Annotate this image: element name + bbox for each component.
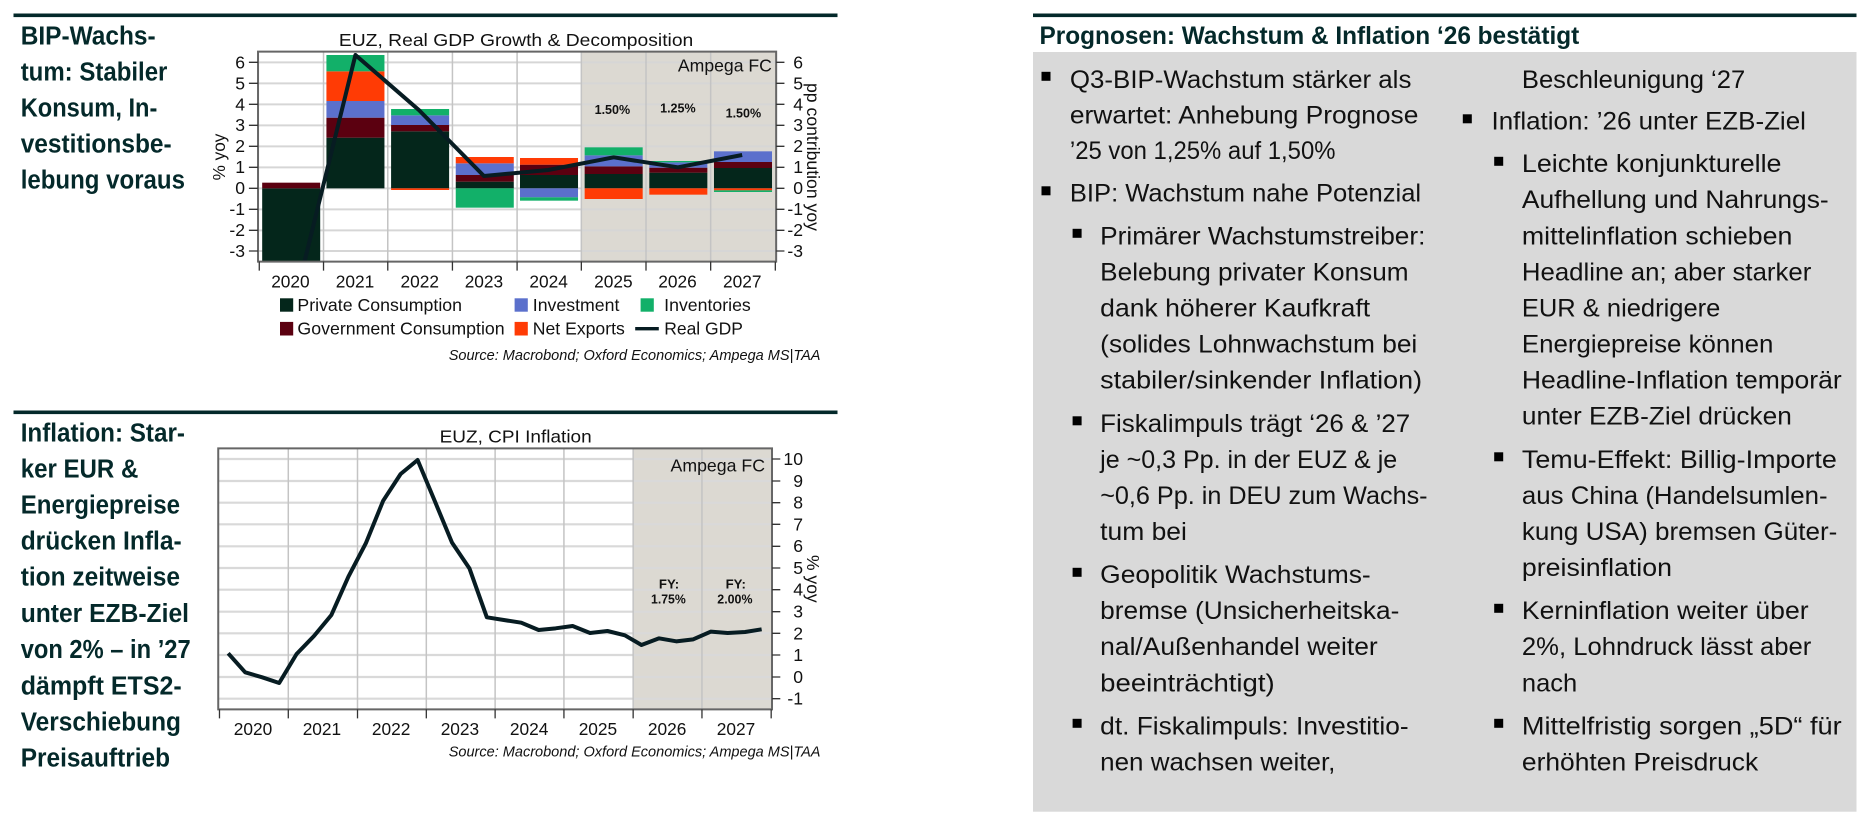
chart: GDP growth and decomposition: 0 (793, 178, 803, 198)
chart: GDP growth and decomposition: 1.25% (660, 101, 696, 115)
text column 2: kung USA) bremsen Güter- (1522, 518, 1837, 546)
chart: CPI inflation: 2021 (303, 719, 341, 739)
chart: GDP growth and decomposition: -3 (229, 241, 245, 261)
text column 1: nen wachsen weiter, (1100, 748, 1335, 776)
text column 2: mittelinflation schieben (1522, 222, 1792, 250)
chart: GDP growth and decomposition: 2 (793, 136, 803, 156)
chart: CPI inflation: 1.75% (651, 592, 686, 606)
heading: GDP: BIP-Wachs- (21, 22, 156, 50)
legend: Real GDP (664, 318, 743, 338)
heading: inflation: dämpft ETS2- (21, 672, 182, 700)
text column 1: dt. Fiskalimpuls: Investitio- (1100, 712, 1409, 740)
text column 1: nal/Außenhandel weiter (1100, 633, 1378, 661)
text column 2: Headline-Inflation temporär (1522, 367, 1842, 395)
chart: CPI inflation: 9 (793, 471, 803, 491)
text column 1: BIP: Wachstum nahe Potenzial (1070, 180, 1421, 208)
text column 2: Energiepreise können (1522, 331, 1773, 359)
text column 2: aus China (Handelsumlen- (1522, 482, 1828, 510)
text column 1 (1042, 66, 1428, 776)
chart: GDP growth and decomposition: -1 (229, 199, 245, 219)
heading: inflation: Verschiebung (21, 709, 181, 737)
text column 1: Fiskalimpuls trägt ‘26 & ’27 (1100, 410, 1410, 438)
panel: inflation section (14, 410, 838, 772)
text column 2: unter EZB-Ziel drücken (1522, 403, 1792, 431)
text column 2: Temu-Effekt: Billig-Importe (1522, 446, 1837, 474)
chart: CPI inflation: EUZ, CPI Inflation (440, 427, 592, 447)
chart: CPI inflation: 2.00% (717, 592, 752, 606)
text column 2: Mittelfristig sorgen „5D“ für (1522, 712, 1842, 740)
heading: forecasts: Prognosen: Wachstum & Inflation ‘26 bestätigt (1040, 22, 1580, 50)
text column 2: Inflation: ’26 unter EZB-Ziel (1492, 108, 1806, 136)
heading: inflation (21, 419, 191, 772)
chart: GDP growth and decomposition: 2025 (594, 272, 633, 292)
chart: GDP growth and decomposition: -1 (787, 199, 803, 219)
text column 2: preisinflation (1522, 554, 1672, 582)
heading: inflation: Inflation: Star- (21, 419, 185, 447)
chart: GDP growth and decomposition: 2027 (723, 272, 762, 292)
text column 2: 2%, Lohndruck lässt aber (1522, 633, 1811, 661)
chart: CPI inflation: 7 (793, 514, 803, 534)
chart: GDP growth and decomposition: 1.50% (726, 106, 761, 120)
text column 2: nach (1522, 669, 1577, 697)
heading: GDP: tum: Stabiler (21, 58, 167, 86)
text column 1: Belebung privater Konsum (1100, 258, 1409, 286)
text column 2: Beschleunigung ‘27 (1522, 66, 1745, 94)
heading: inflation: unter EZB-Ziel (21, 600, 189, 628)
chart: CPI inflation: 8 (793, 493, 803, 513)
chart: CPI inflation: 1 (793, 645, 803, 665)
text column 1: dank höherer Kaufkraft (1100, 295, 1370, 323)
chart: GDP growth and decomposition: -2 (787, 220, 803, 240)
chart: CPI inflation: 5 (793, 558, 803, 578)
text column 2: Headline an; aber starker (1522, 258, 1811, 286)
chart: CPI inflation: FY: (659, 577, 679, 591)
chart: CPI inflation: 2 (793, 623, 803, 643)
chart: GDP growth and decomposition: 2022 (400, 272, 439, 292)
heading: inflation: ker EUR & (21, 455, 138, 483)
text column 1: (solides Lohnwachstum bei (1100, 331, 1417, 359)
chart: GDP growth and decomposition: 1 (235, 157, 245, 177)
text column 1: Primärer Wachstumstreiber: (1100, 222, 1425, 250)
chart: CPI inflation: 2024 (510, 719, 549, 739)
chart: GDP growth and decomposition (209, 30, 823, 364)
chart: GDP growth and decomposition: 0 (235, 178, 245, 198)
chart: CPI inflation: Ampega FC (670, 456, 765, 476)
heading: GDP: lebung voraus (21, 166, 185, 194)
text column 1: je ~0,3 Pp. in der EUZ & je (1099, 446, 1397, 474)
chart: CPI inflation: Source: Macrobond; Oxford Economics; Ampega MS|TAA (449, 744, 820, 761)
heading: GDP: Konsum, In- (21, 94, 157, 122)
legend: Government Consumption (297, 318, 505, 338)
chart: GDP growth and decomposition: 5 (793, 73, 803, 93)
heading: inflation: tion zeitweise (21, 564, 180, 592)
text column 1: ~0,6 Pp. in DEU zum Wachs- (1100, 482, 1428, 510)
chart: CPI inflation: 3 (793, 602, 803, 622)
legend: Private Consumption (297, 295, 462, 315)
text column 1: erwartet: Anhebung Prognose (1070, 102, 1418, 130)
chart: GDP growth and decomposition: 1.50% (595, 103, 630, 117)
chart: GDP growth and decomposition: 1 (793, 157, 803, 177)
chart: GDP growth and decomposition: Source: Macrobond; Oxford Economics; Ampega MS|TAA (449, 347, 820, 364)
chart: CPI inflation: -1 (787, 689, 803, 709)
legend (280, 295, 751, 338)
chart: GDP growth and decomposition: pp contribution yoy (803, 83, 823, 231)
text column 1: Geopolitik Wachstums- (1100, 561, 1371, 589)
heading: inflation: Energiepreise (21, 491, 180, 519)
heading: inflation: von 2% – in ’27 (21, 636, 191, 664)
text column 2: Kerninflation weiter über (1522, 597, 1809, 625)
text column 2: erhöhten Preisdruck (1522, 748, 1759, 776)
heading: inflation: drücken Infla- (21, 528, 182, 556)
chart: CPI inflation: 2025 (579, 719, 617, 739)
legend: Net Exports (533, 318, 625, 338)
chart: GDP growth and decomposition: -2 (229, 220, 245, 240)
chart: GDP growth and decomposition: 2021 (336, 272, 374, 292)
text column 1: bremse (Unsicherheitska- (1100, 597, 1399, 625)
chart: GDP growth and decomposition: 5 (235, 73, 245, 93)
text column 2: EUR & niedrigere (1522, 295, 1720, 323)
chart: CPI inflation: 0 (793, 667, 803, 687)
text column 2: Leichte konjunkturelle (1522, 150, 1782, 178)
chart: GDP growth and decomposition: 3 (235, 115, 245, 135)
text column 2: Aufhellung und Nahrungs- (1522, 186, 1829, 214)
text column 1: Q3-BIP-Wachstum stärker als (1070, 66, 1411, 94)
text column 1: ’25 von 1,25% auf 1,50% (1070, 137, 1336, 165)
chart: CPI inflation: 2027 (717, 719, 755, 739)
text column 1: beeinträchtigt) (1100, 669, 1275, 697)
legend: Investment (533, 295, 620, 315)
legend: Inventories (664, 295, 751, 315)
chart: CPI inflation: 4 (793, 580, 803, 600)
chart: GDP growth and decomposition: Ampega FC (678, 56, 772, 76)
chart: CPI inflation: % yoy (803, 555, 823, 603)
heading: GDP (21, 22, 185, 194)
text column 2 (1463, 66, 1842, 776)
chart: CPI inflation: 2023 (441, 719, 479, 739)
chart: GDP growth and decomposition: 4 (793, 94, 803, 114)
chart: CPI inflation: FY: (726, 577, 746, 591)
chart: CPI inflation (218, 427, 823, 761)
chart: CPI inflation: 2026 (648, 719, 687, 739)
chart: GDP growth and decomposition: EUZ, Real GDP Growth & Decomposition (339, 30, 693, 50)
text column 1: stabiler/sinkender Inflation) (1100, 367, 1422, 395)
chart: GDP growth and decomposition: 2023 (465, 272, 503, 292)
chart: GDP growth and decomposition: 2026 (658, 272, 697, 292)
chart: GDP growth and decomposition: 4 (235, 94, 245, 114)
chart: GDP growth and decomposition: 2 (235, 136, 245, 156)
chart: GDP growth and decomposition: 2020 (271, 272, 310, 292)
chart: GDP growth and decomposition: 6 (235, 52, 245, 72)
text column 1: tum bei (1100, 518, 1187, 546)
chart: GDP growth and decomposition: 3 (793, 115, 803, 135)
chart: GDP growth and decomposition: % yoy (209, 133, 229, 180)
panel: GDP section (14, 14, 838, 364)
chart: CPI inflation: 2020 (234, 719, 273, 739)
chart: CPI inflation: 10 (783, 449, 803, 469)
heading: inflation: Preisauftrieb (21, 744, 170, 772)
chart: CPI inflation: 2022 (372, 719, 410, 739)
chart: GDP growth and decomposition: -3 (787, 241, 803, 261)
chart: GDP growth and decomposition: 2024 (529, 272, 568, 292)
heading: GDP: vestitionsbe- (21, 130, 172, 158)
chart: GDP growth and decomposition: 6 (793, 52, 803, 72)
chart: CPI inflation: 6 (793, 536, 803, 556)
panel: forecasts (1033, 14, 1856, 812)
